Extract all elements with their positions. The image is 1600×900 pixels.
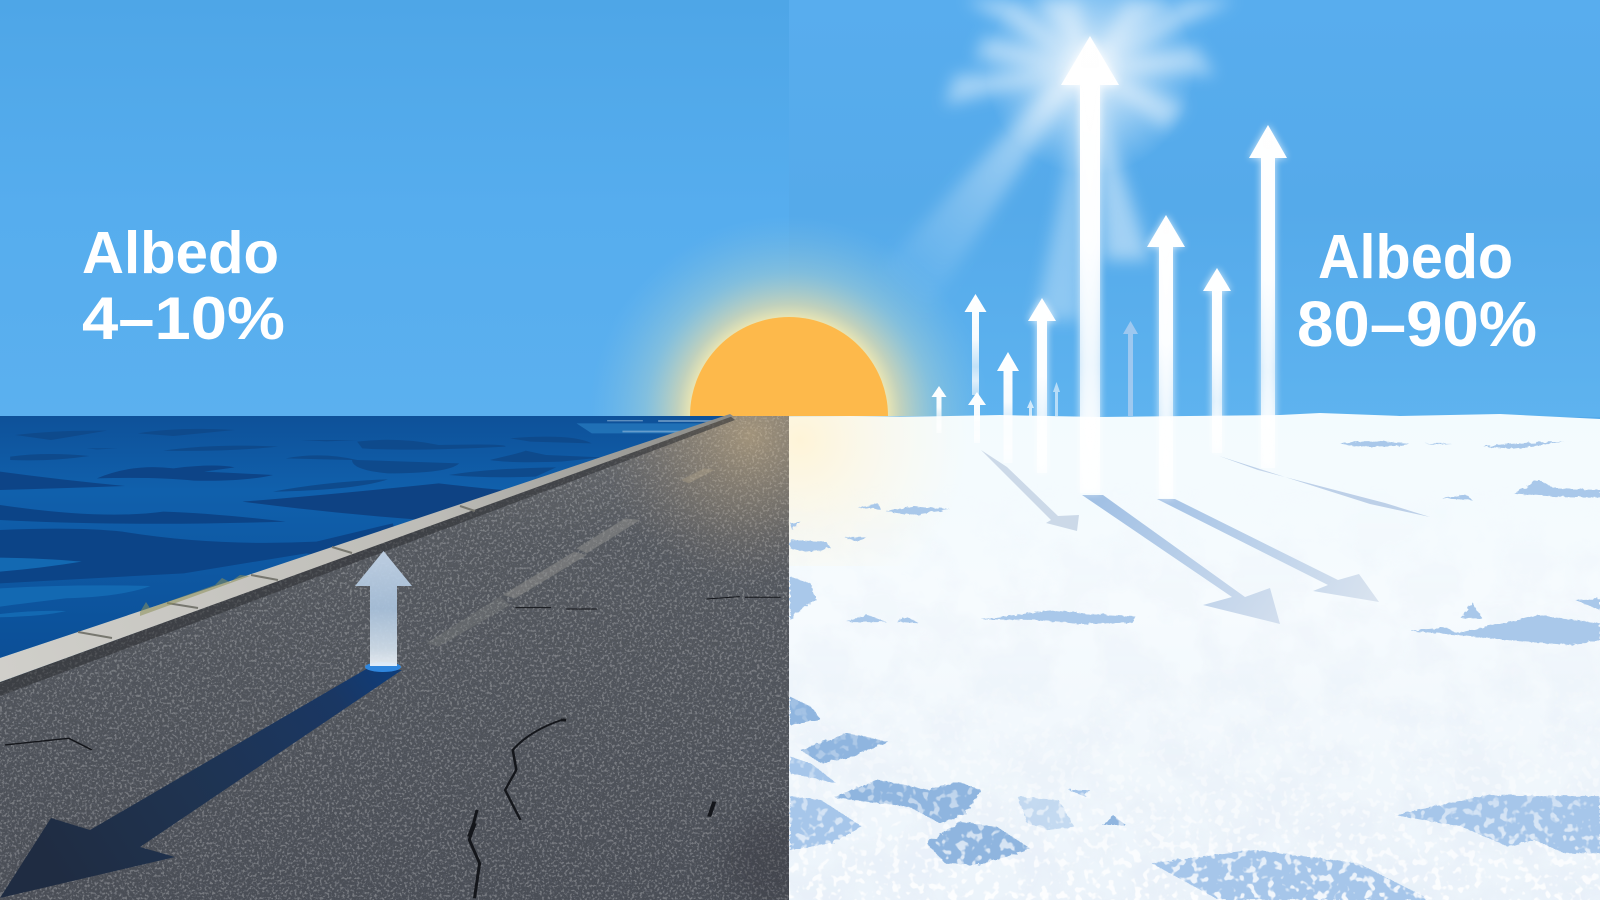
arrow	[1249, 125, 1287, 468]
shadow 3	[1219, 456, 1430, 517]
road cracks	[5, 597, 781, 898]
water base	[0, 416, 730, 666]
sun glow	[606, 232, 971, 416]
kerb joints	[78, 506, 475, 638]
dark asphalt blotch	[722, 811, 789, 900]
warm glow on snow	[789, 416, 942, 558]
arrow	[1203, 268, 1231, 453]
arrow	[1147, 215, 1185, 498]
mottled snow	[789, 480, 1600, 900]
label: ocean and asphalt albedo	[82, 220, 285, 352]
road base	[0, 416, 789, 900]
light rays from the top reflected arrow	[880, 0, 1235, 320]
shadow 2	[1157, 499, 1379, 602]
water swells	[0, 420, 714, 617]
tiny arrow	[1027, 400, 1034, 416]
arrow glow halos	[1028, 36, 1287, 498]
arrow	[968, 392, 986, 443]
roadside grass	[140, 575, 250, 616]
tallest arrow	[1061, 36, 1119, 493]
panel: sky right	[789, 0, 1600, 417]
value right: 80–90%	[1297, 288, 1537, 360]
shadow pointing down-left	[0, 668, 402, 898]
reflected white arrows rising from snow	[932, 36, 1287, 498]
heading left: Albedo	[82, 220, 279, 286]
panel: sky left	[0, 0, 789, 417]
arrow glow	[365, 662, 401, 672]
road kerb	[0, 414, 733, 682]
panel: ocean	[0, 416, 730, 666]
arrow	[1028, 298, 1056, 473]
heading right: Albedo	[1318, 223, 1513, 292]
road grain	[0, 416, 789, 900]
shadows cast on the snow	[981, 450, 1430, 624]
small reflected arrow on road	[355, 551, 412, 672]
snow base	[789, 413, 1600, 900]
arrow	[997, 352, 1019, 463]
arrow body	[355, 551, 412, 666]
long diagonal beam	[880, 70, 1085, 315]
dark curb shadow	[0, 416, 735, 696]
panel: asphalt road	[0, 416, 815, 900]
small road arrow shadow	[0, 668, 402, 898]
faded lane markings	[426, 468, 714, 647]
meltwater patches	[790, 441, 1600, 900]
road speckle	[0, 416, 789, 900]
panel: snow field	[789, 413, 1600, 900]
value left: 4–10%	[82, 285, 285, 352]
label: snow albedo	[1297, 223, 1537, 360]
faint background arrow	[1123, 321, 1138, 416]
star rays	[945, 0, 1235, 260]
second diagonal beam	[1035, 100, 1090, 320]
sun disc	[690, 317, 888, 416]
tiny arrow	[1053, 382, 1060, 416]
shadow 1	[1082, 495, 1280, 624]
star glow	[985, 0, 1195, 175]
shadow 4	[981, 450, 1079, 531]
sun on the horizon	[606, 232, 971, 416]
warm sun glow on road	[632, 416, 789, 558]
arrow	[932, 386, 946, 433]
kerb stones	[0, 414, 733, 682]
arrow	[964, 294, 986, 395]
snow flecks	[789, 699, 1600, 900]
